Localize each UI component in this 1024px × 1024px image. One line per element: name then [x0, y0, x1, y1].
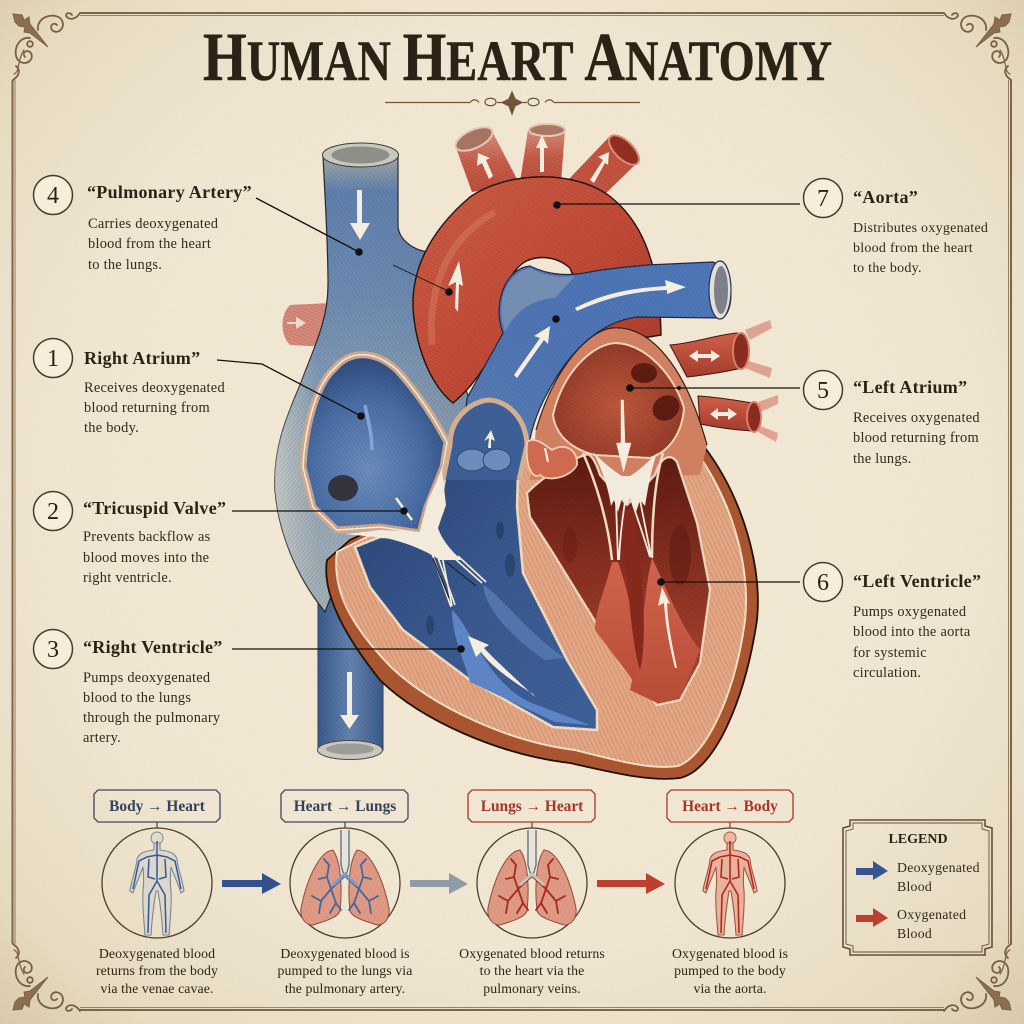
label 1: right atrium: 1: [47, 346, 59, 372]
circulation step 4: heart to body: Heart → Body: [682, 798, 778, 815]
title divider ornament: [385, 92, 640, 114]
label 7: aorta: Distributes oxygenated: [853, 221, 988, 236]
label 5: left atrium: Receives oxygenated: [853, 410, 980, 426]
label 2: tricuspid valve: 2: [47, 499, 59, 525]
vessel: left red stub behind vena cava: [282, 303, 330, 347]
label 6: left ventricle: Pumps oxygenated: [853, 604, 967, 620]
leader lines and dots: [217, 198, 800, 653]
pulmonary trunk chamber and valve: [443, 400, 527, 480]
legend: [843, 820, 992, 955]
label 1: right atrium: [34, 338, 225, 436]
label 6: left ventricle: “Left Ventricle”: [853, 571, 981, 591]
legend: Blood: [897, 879, 932, 894]
circulation step 4: heart to body: pumped to the body: [674, 963, 786, 978]
label 1: right atrium: the body.: [84, 420, 139, 436]
vessels: pulmonary veins on the right: [670, 320, 778, 442]
arrow: step 1 to step 2: [222, 873, 281, 894]
legend: Deoxygenated: [897, 860, 980, 875]
left ventricle chamber: [527, 454, 710, 705]
artery: aortic arch: [413, 177, 661, 403]
circulation step 3: lungs to heart: to the heart via the: [480, 963, 584, 978]
label 5: left atrium: [804, 370, 980, 467]
circulation step 1: body to heart: Body → Heart: [109, 798, 206, 815]
circulation step 3: lungs to heart: Oxygenated blood returns: [459, 946, 605, 961]
icon: body with arteries: [703, 832, 757, 935]
label 1: right atrium: blood returning from: [84, 400, 210, 416]
label 3: right ventricle: 3: [47, 637, 59, 663]
label 2: tricuspid valve: “Tricuspid Valve”: [83, 498, 226, 518]
label 3: right ventricle: “Right Ventricle”: [83, 637, 223, 657]
circulation step 3: lungs to heart: pulmonary veins.: [483, 981, 581, 996]
circulation step 3: lungs to heart: [459, 790, 605, 996]
heart illustration: [275, 122, 778, 779]
arrow: step 3 to step 4: [597, 873, 665, 894]
label 6: left ventricle: circulation.: [853, 665, 921, 681]
arrows in aortic branches and arch: [448, 135, 609, 312]
label 4: pulmonary artery: Carries deoxygenated: [88, 216, 219, 232]
label 3: right ventricle: blood to the lungs: [83, 690, 191, 706]
label 5: left atrium: blood returning from: [853, 430, 979, 446]
label 4: pulmonary artery: to the lungs.: [88, 257, 162, 273]
label 7: aorta: 7: [817, 186, 829, 212]
circulation step 1: body to heart: [94, 790, 220, 996]
circulation step 1: body to heart: via the venae cavae.: [100, 981, 214, 996]
mitral valve and chordae: [583, 452, 663, 560]
label 4: pulmonary artery: [34, 176, 252, 273]
circulation step 3: lungs to heart: Lungs → Heart: [481, 798, 584, 815]
label 3: right ventricle: Pumps deoxygenated: [83, 670, 211, 686]
label 4: pulmonary artery: blood from the heart: [88, 236, 211, 252]
circulation step 2: heart to lungs: Heart → Lungs: [294, 798, 396, 815]
label 6: left ventricle: [804, 562, 981, 681]
title: HUMAN HEART ANATOMY: [203, 19, 832, 95]
vessel: inferior vena cava: [318, 590, 383, 760]
label 5: left atrium: 5: [817, 378, 829, 404]
circulation step 2: heart to lungs: [278, 790, 412, 996]
vessel: superior vena cava and right heart exterior: [275, 143, 470, 612]
circulation step 2: heart to lungs: pumped to the lungs via: [278, 963, 412, 978]
circulation step 4: heart to body: Oxygenated blood is: [672, 946, 788, 961]
circulation step 1: body to heart: Deoxygenated blood: [99, 946, 215, 961]
legend arrow: oxygenated: [856, 908, 888, 927]
right atrium chamber: [303, 355, 447, 533]
label 5: left atrium: the lungs.: [853, 451, 912, 467]
aortic valve cusps: [527, 440, 577, 478]
label 3: right ventricle: artery.: [83, 730, 121, 746]
artery: pulmonary artery: [460, 261, 731, 470]
label 6: left ventricle: for systemic: [853, 645, 927, 661]
label 7: aorta: to the body.: [853, 261, 922, 276]
left atrium cutaway: [530, 328, 707, 480]
icon: lungs with red vessels: [488, 830, 576, 925]
label 6: left ventricle: 6: [817, 570, 829, 596]
label 5: left atrium: “Left Atrium”: [853, 377, 967, 397]
label 1: right atrium: Receives deoxygenated: [84, 380, 225, 396]
label 4: pulmonary artery: “Pulmonary Artery”: [87, 182, 252, 202]
vessel: aortic branches: [452, 122, 644, 196]
circulation step 2: heart to lungs: Deoxygenated blood is: [280, 946, 410, 961]
label 2: tricuspid valve: right ventricle.: [83, 570, 172, 586]
label 2: tricuspid valve: blood moves into the: [83, 550, 209, 566]
label 1: right atrium: Right Atrium”: [84, 348, 200, 368]
legend: Blood: [897, 926, 932, 941]
circulation step 2: heart to lungs: the pulmonary artery.: [285, 981, 405, 996]
legend: Oxygenated: [897, 907, 966, 922]
arrow: step 2 to step 3: [410, 873, 468, 894]
right ventricle chamber: [355, 450, 597, 730]
heart wall: outer myocardium: [326, 420, 758, 779]
label 3: right ventricle: [34, 630, 223, 746]
tricuspid valve leaflets and chordae: [345, 470, 486, 607]
icon: lungs with blue vessels: [301, 830, 389, 925]
circulation step 1: body to heart: returns from the body: [96, 963, 218, 978]
label 7: aorta: blood from the heart: [853, 241, 973, 256]
label 4: pulmonary artery: 4: [47, 183, 59, 209]
legend: LEGEND: [888, 832, 948, 847]
circulation step 4: heart to body: via the aorta.: [693, 981, 767, 996]
label 7: aorta: [804, 178, 988, 276]
white flow arrows in chambers: [468, 400, 677, 697]
label 3: right ventricle: through the pulmonary: [83, 710, 221, 726]
legend arrow: deoxygenated: [856, 861, 888, 880]
label 2: tricuspid valve: [34, 492, 226, 586]
label 2: tricuspid valve: Prevents backflow as: [83, 529, 211, 545]
circulation step 4: heart to body: [667, 790, 793, 996]
icon: body with veins: [130, 832, 184, 935]
label 7: aorta: “Aorta”: [853, 187, 918, 207]
label 6: left ventricle: blood into the aorta: [853, 624, 971, 640]
